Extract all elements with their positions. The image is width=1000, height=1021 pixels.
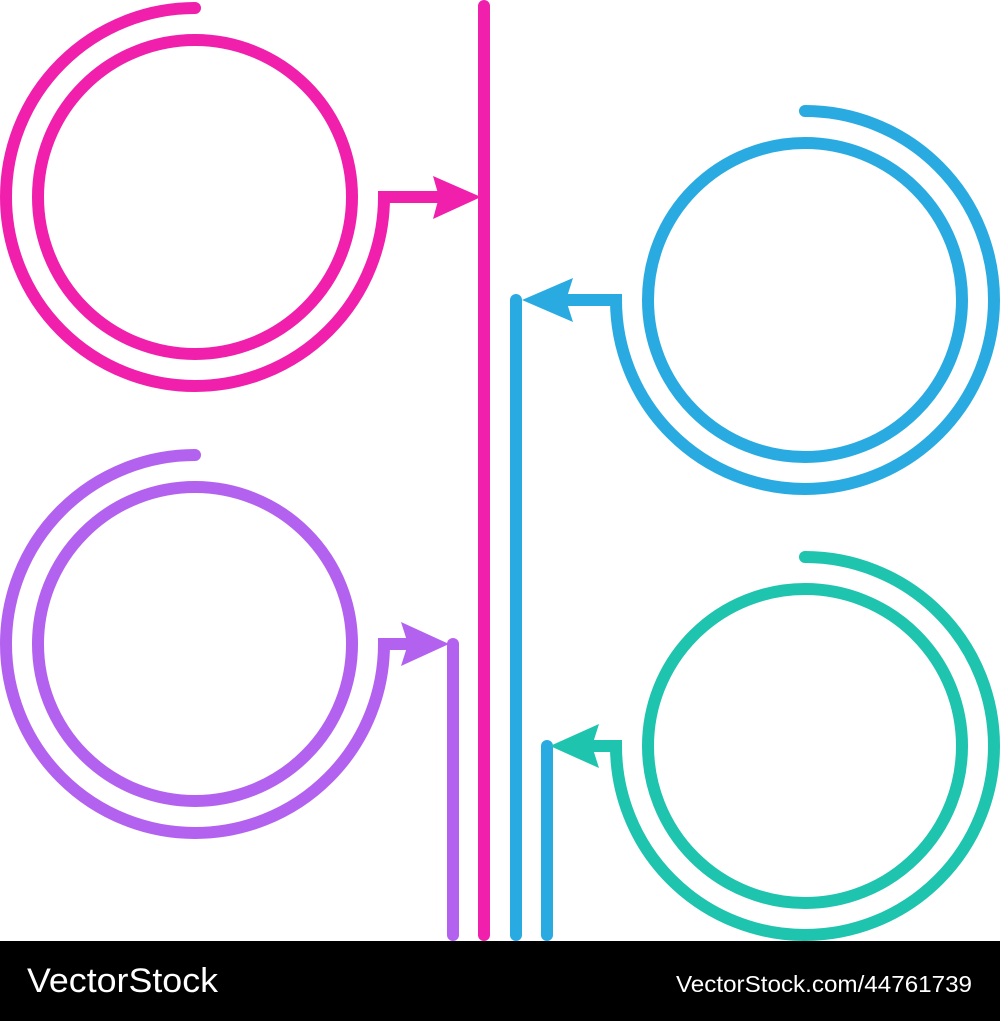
- pink inner circle: [38, 40, 352, 354]
- footer image id text: VectorStock.com/44761739: [676, 971, 972, 997]
- circle group: teal: [550, 557, 994, 935]
- pink outer spiral: [6, 8, 445, 386]
- footer logo text: VectorStock: [27, 962, 219, 1000]
- vertical line: pink: [478, 6, 490, 935]
- circle group: pink: [6, 8, 481, 386]
- purple arrowhead: [401, 622, 449, 666]
- blue arrowhead: [522, 278, 573, 322]
- teal arrowhead: [550, 724, 599, 768]
- teal inner circle: [648, 589, 962, 903]
- circle group: purple: [6, 455, 449, 833]
- purple inner circle: [38, 487, 352, 801]
- pink arrowhead: [433, 176, 481, 219]
- blue inner circle: [648, 143, 962, 457]
- vertical line: purple: [447, 644, 459, 935]
- blue outer spiral: [560, 111, 994, 489]
- circle group: blue: [522, 111, 994, 489]
- footer bar: [0, 941, 1000, 1021]
- vertical line: blue long: [510, 300, 522, 935]
- teal outer spiral: [585, 557, 994, 935]
- vertical line: blue short: [541, 746, 553, 935]
- purple outer spiral: [6, 455, 415, 833]
